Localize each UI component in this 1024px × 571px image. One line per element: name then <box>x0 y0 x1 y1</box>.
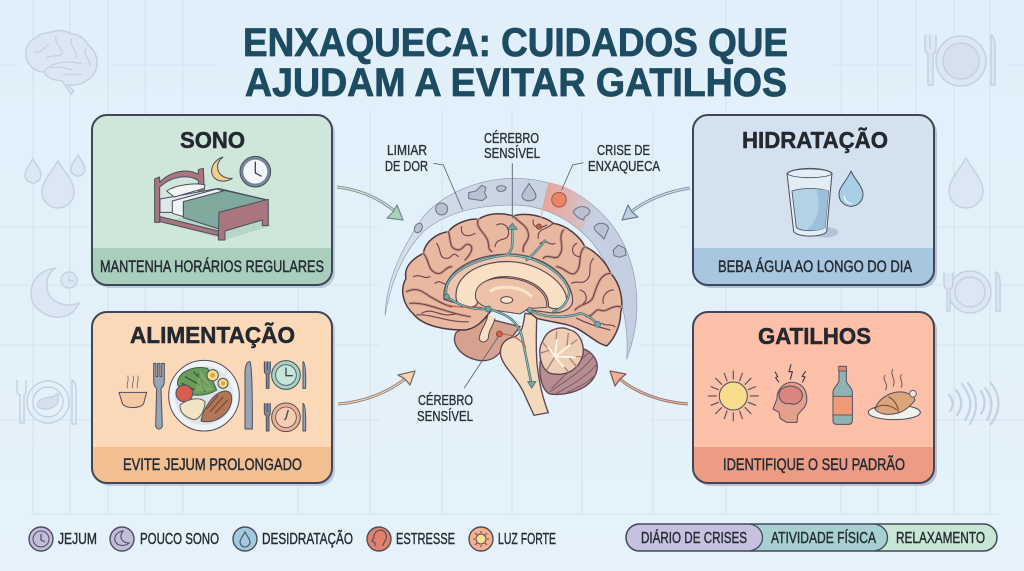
pill: diário de crises: DIÁRIO DE CRISES <box>641 530 747 547</box>
heading: sono: SONO <box>180 127 245 153</box>
caption: alimentação: EVITE JEJUM PROLONGADO <box>123 456 302 474</box>
decorative icon: drops left <box>25 155 85 208</box>
panel: alimentação <box>92 312 335 486</box>
label: limiar de dor: LIMIAR <box>387 143 427 159</box>
title: ENXAQUECA: CUIDADOS QUE <box>243 21 788 65</box>
heading: hidratação: HIDRATAÇÃO <box>742 126 888 153</box>
brain: cerebellum <box>540 328 597 394</box>
pills: habits <box>626 524 997 551</box>
icon: glass of water and drop <box>787 168 863 238</box>
arrow: gatilhos to brain <box>610 371 688 404</box>
decorative icon: sound waves <box>949 383 998 424</box>
arrow: hidratação to brain <box>622 188 690 220</box>
label: cérebro sensível bottom: CÉREBRO <box>418 392 473 409</box>
caption: hidratação: BEBA ÁGUA AO LONGO DO DIA <box>718 257 912 276</box>
label leader lines <box>433 163 583 388</box>
heading: gatilhos: GATILHOS <box>758 323 871 349</box>
brain: stem <box>500 313 548 415</box>
icon: sun, head, bottle and food <box>708 364 920 424</box>
illustration: brain <box>403 163 622 415</box>
label: cérebro sensível top: CÉREBRO <box>484 130 539 147</box>
legend item: luz forte: LUZ FORTE <box>498 531 556 548</box>
decorative icon: plate left <box>17 380 76 424</box>
arrow: sono to brain <box>337 187 403 220</box>
decorative icon: drop right <box>949 158 983 208</box>
label: cérebro sensível top: SENSÍVEL <box>484 145 540 162</box>
label: crise de enxaqueca <box>588 143 660 175</box>
legend item: luz forte <box>469 527 556 551</box>
brain: neural pathways <box>446 228 598 385</box>
brain: cerebrum <box>403 214 622 346</box>
title <box>243 21 788 105</box>
label: cérebro sensível bottom: SENSÍVEL <box>417 408 473 425</box>
pill: atividade física: ATIVIDADE FÍSICA <box>771 530 877 547</box>
panel: gatilhos <box>693 312 937 486</box>
panel: hidratação <box>693 115 937 288</box>
arc icons <box>413 183 626 257</box>
caption: gatilhos: IDENTIFIQUE O SEU PADRÃO <box>723 454 905 474</box>
brain: corpus callosum <box>444 254 573 313</box>
label: cérebro sensível top <box>484 130 540 162</box>
arrow: alimentação to brain <box>338 371 415 404</box>
heading: alimentação: ALIMENTAÇÃO <box>130 321 295 348</box>
decorative icon: plate right <box>944 271 1000 313</box>
decorative icon: moon and clock <box>31 268 79 317</box>
label: cérebro sensível bottom <box>417 392 473 425</box>
legend item: desidratação: DESIDRATAÇÃO <box>262 531 353 548</box>
panel: sono <box>92 115 335 288</box>
legend item: pouco sono <box>110 527 219 551</box>
label: crise de enxaqueca: CRISE DE <box>597 143 650 159</box>
legend item: estresse: ESTRESSE <box>396 531 455 548</box>
label: limiar de dor <box>385 143 428 175</box>
legend item: jejum: JEJUM <box>58 531 97 548</box>
brain: temporal lobe <box>454 317 520 361</box>
chart: pain threshold arc <box>385 178 637 359</box>
label: crise de enxaqueca: ENXAQUECA <box>588 159 660 175</box>
legend item: pouco sono: POUCO SONO <box>140 531 219 548</box>
icon: meal, cutlery and clocks <box>119 360 306 432</box>
decorative icon: plate top right <box>925 35 995 86</box>
legend item: desidratação <box>233 527 353 551</box>
decorative icon: faded brain <box>26 31 97 94</box>
title: AJUDAM A EVITAR GATILHOS <box>245 61 787 105</box>
legend: triggers <box>29 527 556 551</box>
pill: relaxamento: RELAXAMENTO <box>896 530 985 547</box>
caption: sono: MANTENHA HORÁRIOS REGULARES <box>100 257 324 276</box>
legend item: estresse <box>367 527 455 551</box>
icon: bed, moon and clock <box>155 156 272 240</box>
label: limiar de dor: DE DOR <box>385 159 428 175</box>
legend item: jejum <box>29 527 97 551</box>
